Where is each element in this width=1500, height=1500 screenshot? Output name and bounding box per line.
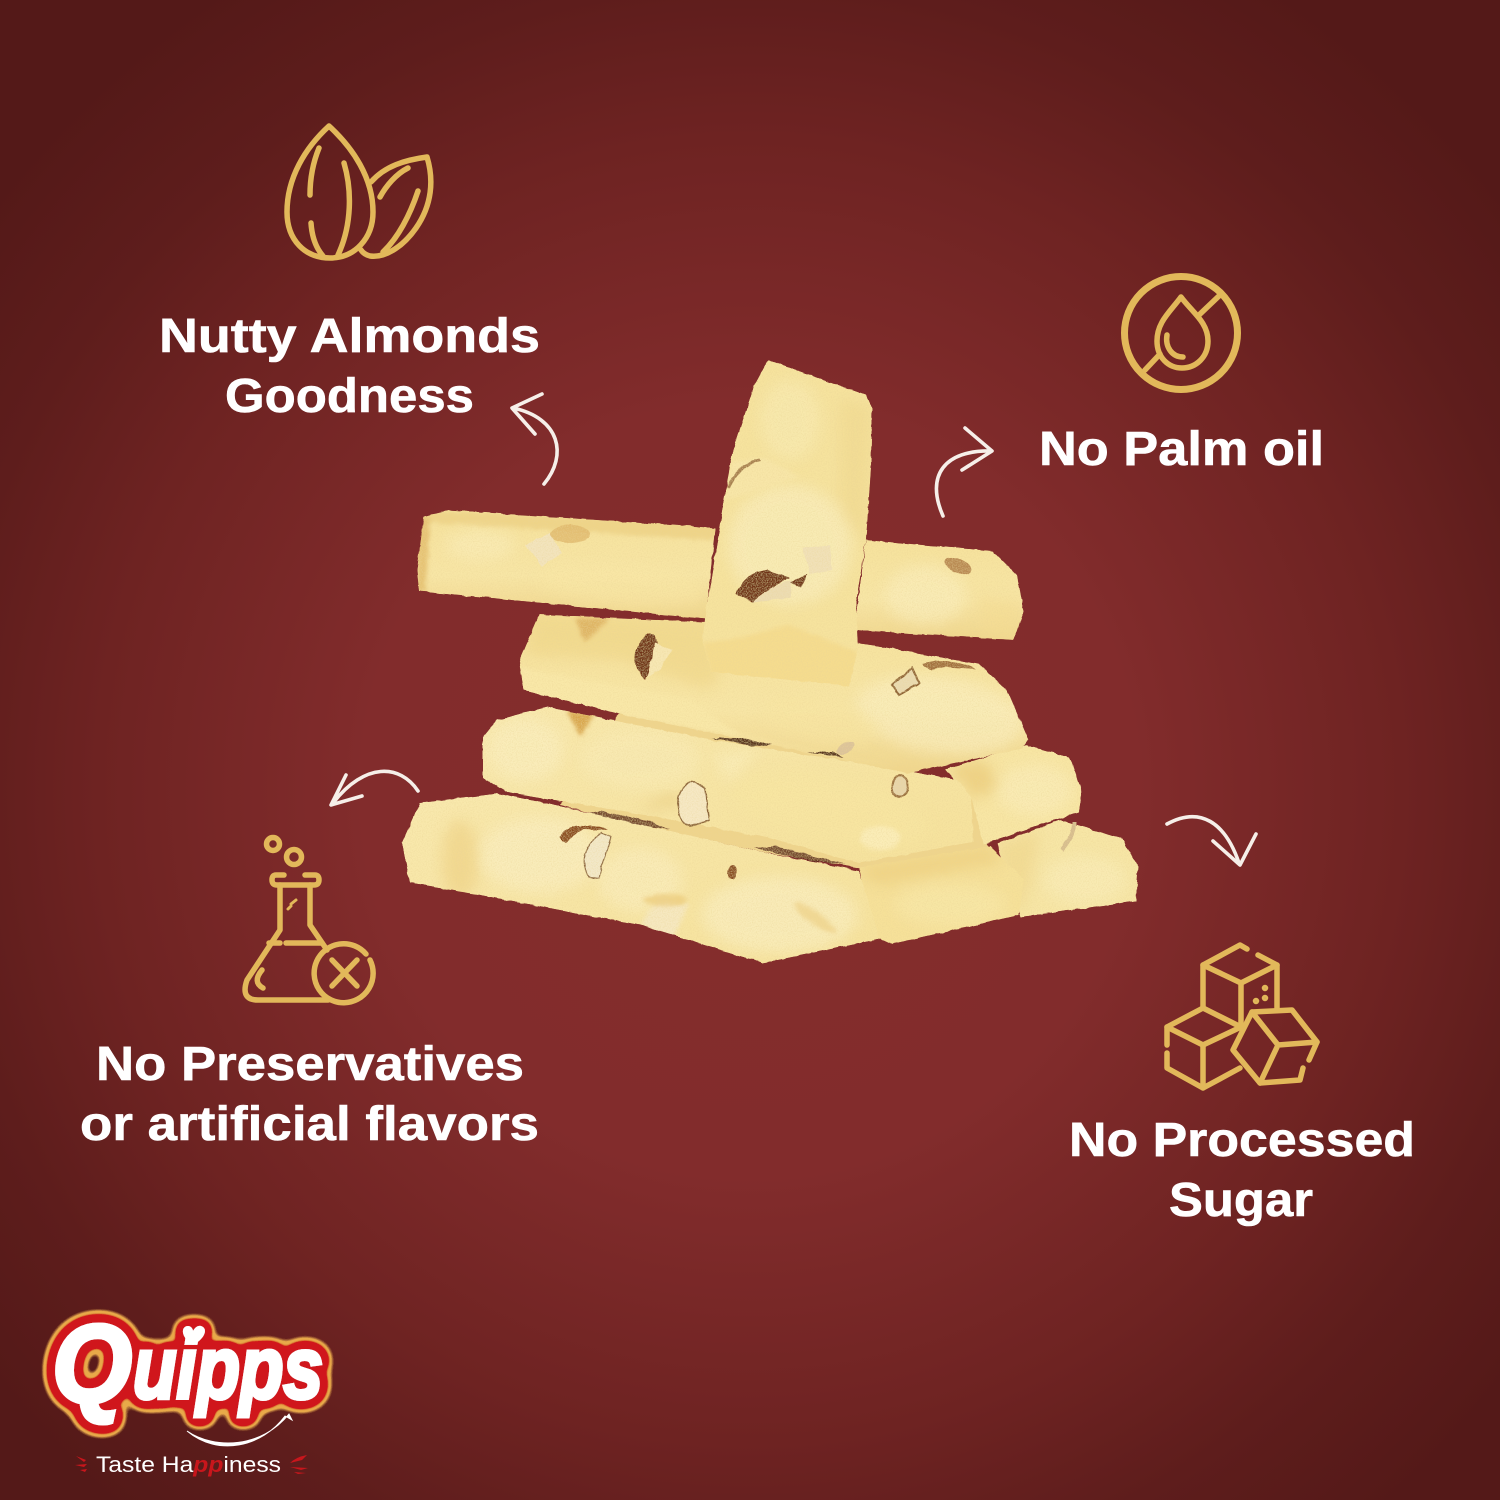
heading: No Preservatives or artificial flavors: or artificial flavors xyxy=(80,1098,539,1151)
cookie: bottom middle xyxy=(855,844,1024,944)
logo wordmark xyxy=(52,1303,323,1426)
cookie stack backing xyxy=(560,712,990,905)
logo tagline: Taste Ha ppiness xyxy=(96,1452,281,1477)
logo smile xyxy=(187,1414,292,1446)
cookie: upright leaning bar xyxy=(702,360,872,690)
logo splashes xyxy=(75,1455,308,1474)
heading: No Palm oil: No Palm oil xyxy=(1039,423,1324,476)
cookie: bottom front bar xyxy=(402,793,880,963)
heading: No Processed Sugar: Sugar xyxy=(1169,1174,1313,1227)
heading: No Preservatives or artificial flavors xyxy=(80,1038,539,1151)
heading: Nutty Almonds Goodness xyxy=(159,310,540,423)
cookie: horizontal top bar left xyxy=(417,510,720,619)
heading: No Preservatives or artificial flavors: No Preservatives xyxy=(96,1038,524,1091)
cookie: back right lower xyxy=(995,820,1138,917)
cookie: second tier bar xyxy=(519,612,1029,773)
logo wordmark: Q xyxy=(52,1303,132,1426)
cookie: third tier bar xyxy=(483,707,973,864)
heading: Nutty Almonds Goodness: Nutty Almonds xyxy=(159,310,540,363)
icon: sugar cubes xyxy=(1167,945,1317,1088)
arrow: to No Preservatives xyxy=(331,771,418,805)
almond pieces xyxy=(525,460,1074,879)
logo: Quipps xyxy=(52,1303,323,1477)
cookie: right middle xyxy=(945,745,1082,844)
arrow: to No Palm oil xyxy=(936,428,992,516)
icon: flask with cross xyxy=(245,838,373,1003)
photo: stack of almond cookies xyxy=(402,360,1138,963)
arrow: to Nutty Almonds xyxy=(512,394,557,484)
heading: No Processed Sugar xyxy=(1069,1114,1415,1227)
logo wordmark: uipps xyxy=(133,1318,323,1417)
heading: No Processed Sugar: No Processed xyxy=(1069,1114,1415,1167)
icon: no palm oil drop xyxy=(1124,276,1238,390)
cookie: horizontal top bar right xyxy=(854,540,1024,640)
arrow: to No Processed Sugar xyxy=(1167,817,1256,865)
icon: almonds xyxy=(287,126,431,258)
heading: Nutty Almonds Goodness: Goodness xyxy=(225,370,474,423)
